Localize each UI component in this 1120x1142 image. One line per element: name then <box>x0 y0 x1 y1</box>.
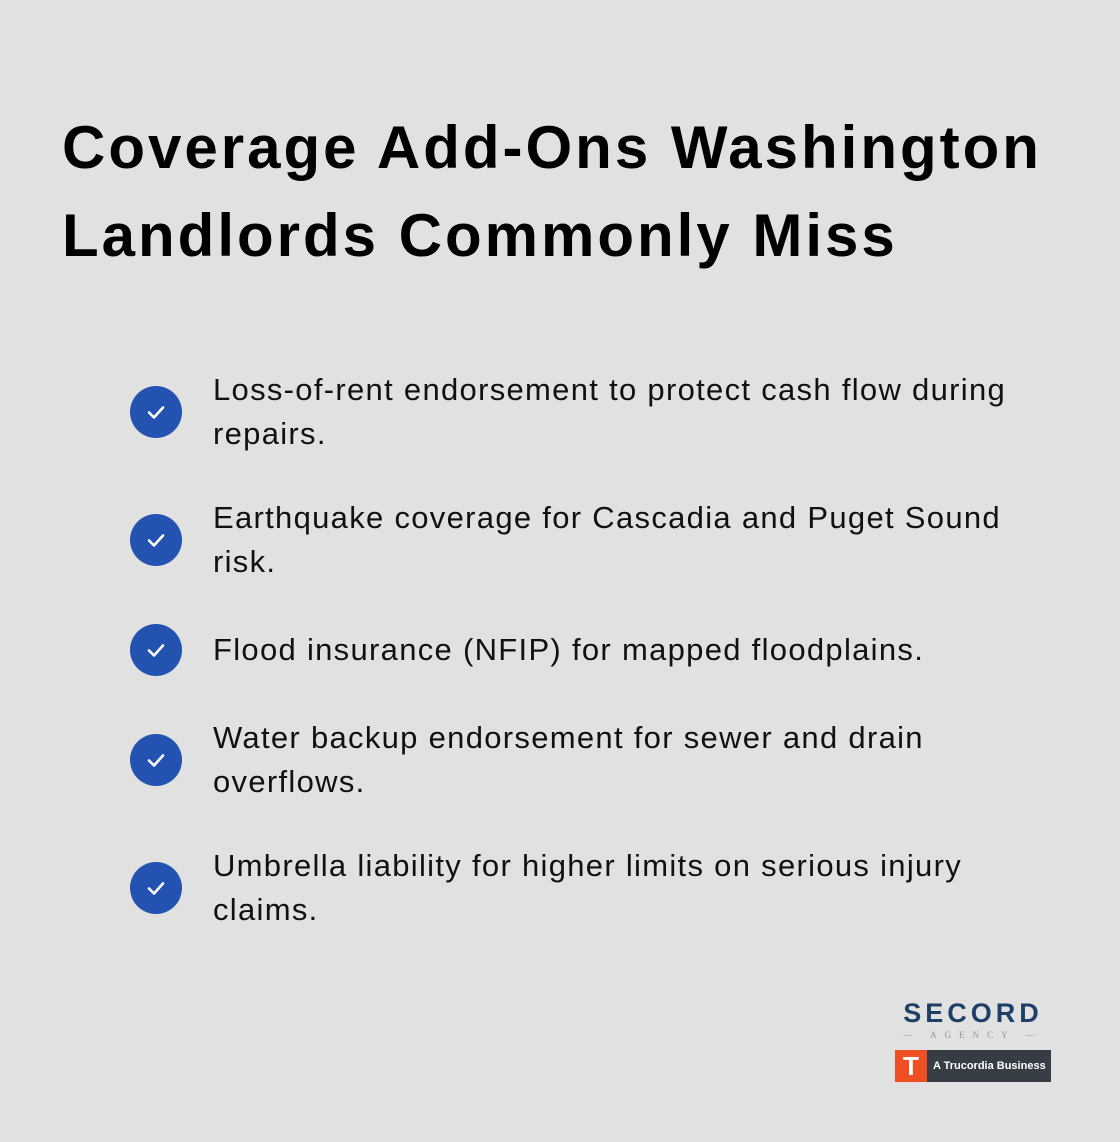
icon: check <box>130 862 182 914</box>
text: Water backup endorsement for sewer and drain <box>213 720 924 755</box>
text: Umbrella liability for higher limits on serious injury <box>213 848 962 883</box>
item 3 <box>130 624 924 676</box>
item 1 <box>130 372 1006 451</box>
text <box>213 500 1001 579</box>
title: Coverage Add-Ons Washington <box>62 114 1042 181</box>
logo: trucordia badge: A Trucordia Business <box>933 1060 1046 1072</box>
text: risk. <box>213 544 276 579</box>
title <box>62 114 1042 269</box>
icon: check <box>130 514 182 566</box>
text: claims. <box>213 892 319 927</box>
text <box>213 848 962 927</box>
text <box>213 720 924 799</box>
text: Loss-of-rent endorsement to protect cash flow during <box>213 372 1006 407</box>
logo: agency: — AGENCY — <box>903 1030 1043 1040</box>
item 5 <box>130 848 962 927</box>
text: Flood insurance (NFIP) for mapped floodplains. <box>213 632 924 667</box>
text: Earthquake coverage for Cascadia and Puget Sound <box>213 500 1001 535</box>
text: repairs. <box>213 416 327 451</box>
logo: trucordia badge <box>895 1050 1051 1082</box>
title: Landlords Commonly Miss <box>62 202 898 269</box>
logo <box>895 998 1051 1082</box>
item 2 <box>130 500 1001 579</box>
item 4 <box>130 720 924 799</box>
logo: secord: SECORD <box>903 998 1043 1028</box>
logo: trucordia badge: T <box>903 1051 919 1081</box>
text <box>213 372 1006 451</box>
icon: check <box>130 624 182 676</box>
text: overflows. <box>213 764 366 799</box>
icon: check <box>130 734 182 786</box>
icon: check <box>130 386 182 438</box>
